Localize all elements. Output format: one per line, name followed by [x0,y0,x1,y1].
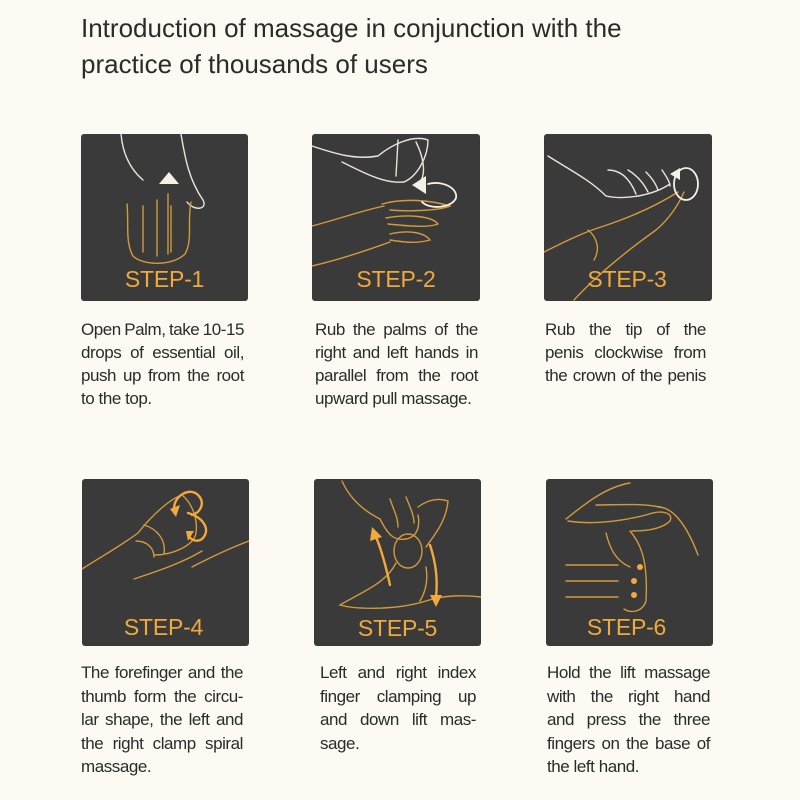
title: practice of thousands of users [81,49,428,79]
text: step 1: 10-15 [203,320,244,339]
step label: STEP-4 [124,614,203,640]
text: step 4: lar [81,710,99,729]
text: step 4: The [81,663,109,682]
text: step 3: Rub [545,320,575,339]
text: step 1: from [148,366,180,385]
text: step 2: Rub [315,320,345,339]
icon: rotation arrow [422,183,456,207]
text: step 6: the [626,734,648,752]
text: step 6: and [547,710,574,729]
text: step 3: from [674,343,706,362]
text: step 4: and [188,663,215,682]
text: step 5: sage. [320,734,359,752]
text: step 4: the [221,663,243,682]
text: step 5: Left [320,663,347,682]
text: step 1: up [123,366,141,385]
text: step 6: the [639,710,661,729]
text: step 2: parallel [315,366,366,385]
illustration: step 5 hands [338,480,481,609]
text: step 4: shape, [105,710,153,729]
illustration: step 1 hands [120,134,205,264]
text: step 4: spiral [205,734,243,752]
text: step 6: hand [674,686,710,706]
text: step 6 [547,663,710,776]
icon: up arrow [159,172,179,184]
text: step 3: clockwise [594,343,663,362]
text: step 3: penis [545,343,583,362]
text: step 1: push [81,366,116,385]
text: step 4: form [134,686,166,706]
text: step 5: and [358,663,385,682]
text: step 1: Palm, [124,320,165,339]
text: step 4: the [174,686,196,706]
text: step 2 [315,320,478,408]
text: step 4: thumb [81,686,126,706]
text: step 6: fingers [547,734,595,752]
panel: step 4 [82,479,249,646]
text: step 1: Open [81,320,121,339]
step label: STEP-2 [356,266,436,292]
text: step 2: the [353,320,375,339]
text: step 2: the [456,320,478,339]
illustration: step 3 hands [544,155,699,301]
text: step 3: of [656,320,670,339]
text: step 6: of [697,734,710,752]
illustration: step 4 hands [82,490,249,580]
text: step 2: hands [415,343,459,362]
text: step 6: three [673,710,710,729]
panel: step 2 [312,134,480,301]
text: step 2: root [450,366,478,385]
text: step 3: penis [668,366,706,385]
text: step 5: mas- [440,710,476,729]
text: step 1: take [169,320,199,339]
text: step 4: left [189,710,209,729]
icon: down arrow [430,545,437,597]
text: step 4: forefinger [115,663,182,682]
text: step 3 [545,320,706,385]
text: step 2: and [353,343,380,362]
text: step 3: the [684,320,706,339]
text: step 5: up [458,686,476,706]
text: step 5: index [438,663,476,682]
step label: STEP-3 [587,266,667,292]
text: step 3: tip [625,320,642,339]
text: step 4: and [216,710,243,729]
text: step 5: and [320,710,347,729]
text: step 2: in [466,343,478,362]
illustration: step 6 hands [565,482,699,612]
text: step 2: from [376,366,408,385]
text: step 5: finger [320,686,360,706]
text: step 4: the [160,710,182,729]
text: step 5: down [360,710,399,729]
text: step 3: crown [573,366,616,385]
illustration: step 2 hands [312,138,458,267]
text: step 4: the [81,734,103,752]
text: step 2: upward pull massage. [315,389,471,408]
text: step 5: clamping [377,686,441,706]
text: step 1 [81,320,244,408]
text: step 2: of [434,320,448,339]
text: step 4: circu- [204,686,243,706]
title [81,13,622,79]
text: step 1: of [130,343,143,362]
text: step 4 [81,663,243,776]
text: step 6: lift [620,663,635,682]
text: step 6: the [589,663,611,682]
text: step 6: the [591,686,613,706]
icon: clockwise arrow [674,168,698,200]
panel: step 3 [544,134,712,301]
icon: pressure dots [637,564,643,570]
text: step 4: clamp [153,734,196,752]
text: step 5 [320,663,476,752]
text: step 2: right [315,343,346,362]
icon: spiral arrows [174,492,206,541]
text: step 1: essential [152,343,215,362]
text: step 1: the [187,366,210,385]
text: step 2: the [418,366,441,385]
step label: STEP-5 [358,615,437,641]
text: step 4: massage. [81,757,151,776]
text: step 6: with [547,686,575,706]
panel: step 6 [546,479,713,646]
text: step 1: root [216,366,244,385]
step label: STEP-6 [587,614,666,640]
text: step 6: massage [644,663,710,682]
text: step 3: the [545,366,567,385]
text: step 5: lift [412,710,427,729]
text: step 3: the [640,366,662,385]
text: step 6: the left hand. [547,757,639,776]
text: step 6: base [655,734,690,752]
text: step 6: on [601,734,620,752]
text: step 6: press [587,710,626,729]
title: Introduction of massage in conjunction with the [81,13,622,43]
panel: step 5 [314,479,481,646]
text: step 3: of [621,366,634,385]
text: step 5: right [396,663,427,682]
text: step 3: the [589,320,611,339]
panel: step 1 [81,134,248,301]
icon: up arrow [376,537,390,585]
text: step 1: oil, [224,343,244,362]
text: step 6: right [628,686,659,706]
step label: STEP-1 [125,266,204,292]
text: step 1: drops [81,343,121,362]
text: step 4: right [113,734,143,752]
text: step 6: Hold [547,663,580,682]
text: step 1: to the top. [81,389,152,408]
text: step 2: left [387,343,408,362]
text: step 2: palms [383,320,426,339]
